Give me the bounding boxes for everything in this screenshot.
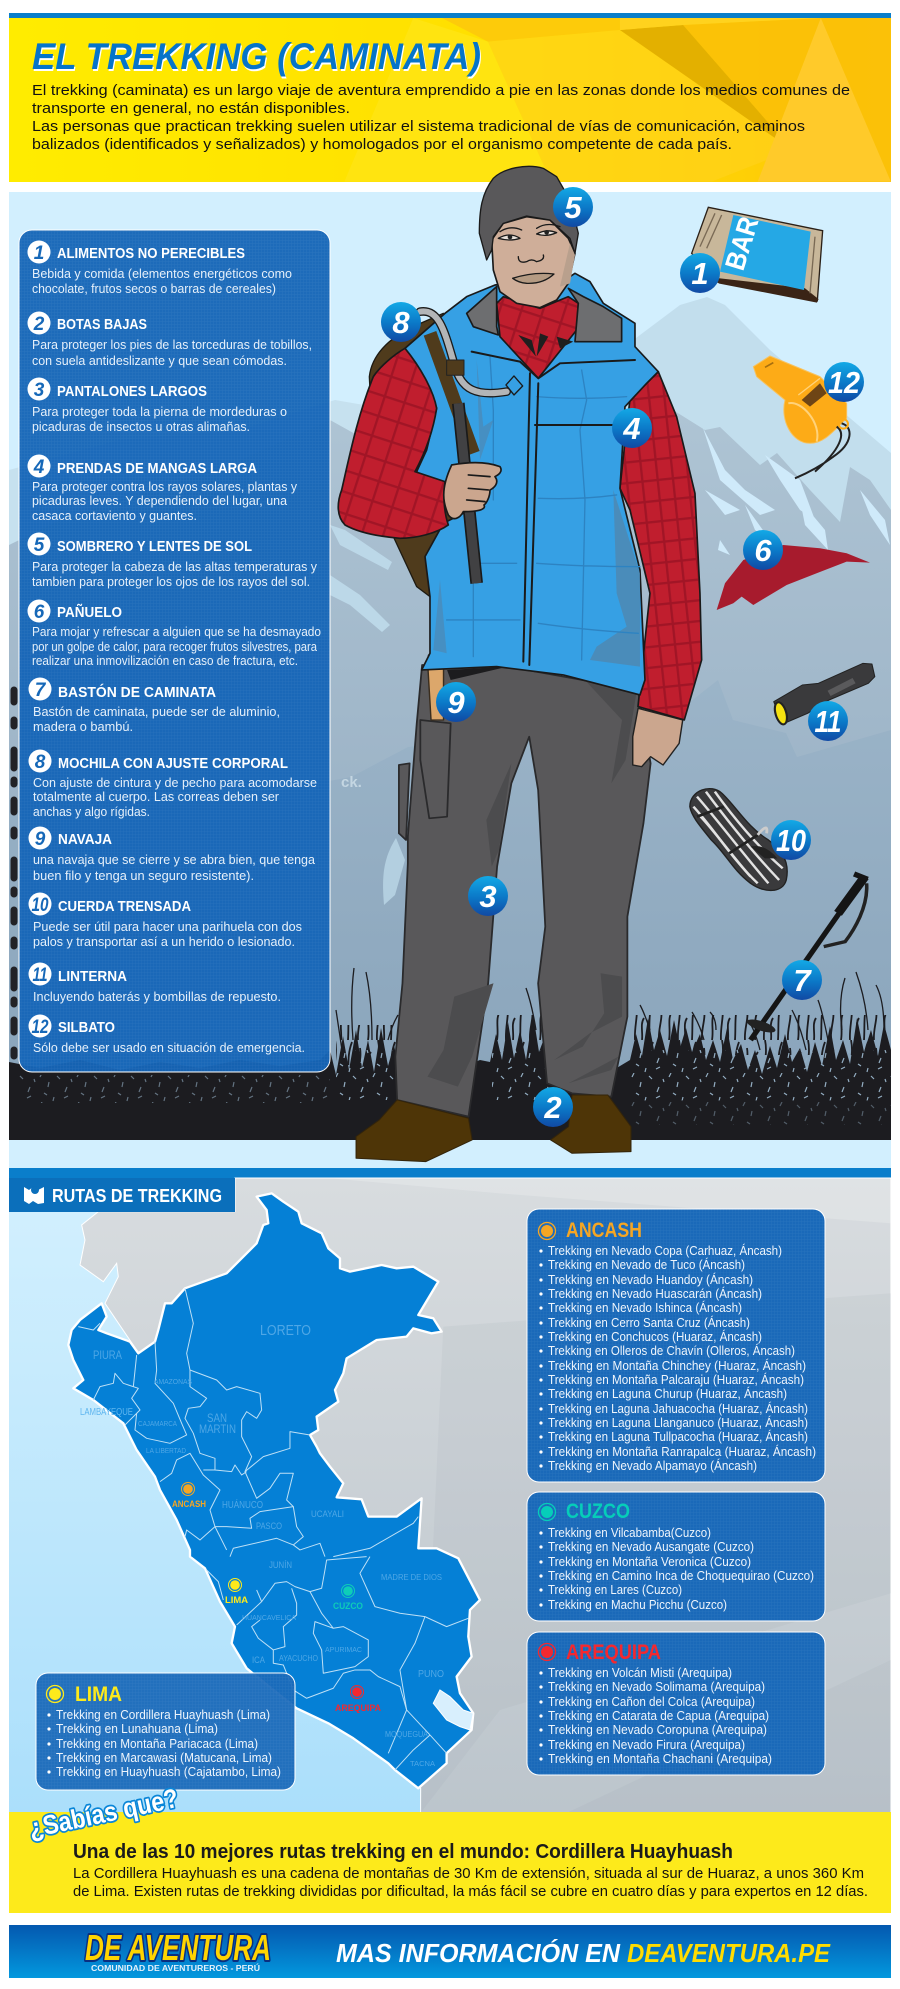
region labels: ICA <box>252 1655 265 1665</box>
icon: energy bar <box>692 207 823 301</box>
routes box: Ancash: Trekking en Nevado Huascarán (Áncash) <box>548 1286 762 1301</box>
list item 2: 2 <box>33 314 45 335</box>
list item 3: picaduras de insectos u otras alimañas. <box>32 419 250 434</box>
routes box: Cuzco: Trekking en Machu Picchu (Cuzco) <box>548 1598 727 1612</box>
routes box: Arequipa <box>527 1632 825 1775</box>
list item 10: CUERDA TRENSADA <box>58 899 191 915</box>
trekker upper body <box>338 166 702 720</box>
list item 7: 7 <box>35 680 47 701</box>
list item 2: Para proteger los pies de las torceduras de tobillos, <box>32 337 312 352</box>
panel: equipment scene background <box>9 192 891 1168</box>
list item 7 <box>28 678 280 734</box>
list item 6: PAÑUELO <box>57 603 122 621</box>
icon: rope coil <box>690 789 787 890</box>
list item 11: Incluyendo baterás y bombillas de repuesto. <box>33 989 281 1004</box>
list item 8 <box>28 750 317 819</box>
list item 6: Para mojar y refrescar a alguien que se ha desmayado <box>32 624 321 639</box>
list item 10: Puede ser útil para hacer una parihuela con dos <box>33 919 302 934</box>
routes box: Cuzco: Trekking en Camino Inca de Choquequirao (Cuzco) <box>548 1569 814 1583</box>
routes box: Arequipa: Trekking en Montaña Chachani (Arequipa) <box>548 1752 772 1766</box>
list item 12 <box>28 1014 305 1055</box>
routes box: Cuzco: CUZCO <box>566 1500 630 1523</box>
map marker: Lima <box>225 1578 248 1606</box>
routes box: Lima: LIMA <box>75 1683 122 1706</box>
list item 9: 9 <box>35 829 46 850</box>
routes box: Ancash: Trekking en Nevado de Tuco (Áncash) <box>548 1257 745 1272</box>
numbered badge 1 <box>680 253 720 293</box>
list item 12: Sólo debe ser usado en situación de emergencia. <box>33 1040 305 1055</box>
routes box: Ancash: Trekking en Laguna Llanganuco (Huaraz, Áncash) <box>548 1415 808 1430</box>
icon: red scarf <box>717 545 870 610</box>
routes box: Ancash: Trekking en Nevado Copa (Carhuaz, Áncash) <box>548 1243 782 1258</box>
list item 1: 1 <box>34 243 44 264</box>
list item 2: BOTAS BAJAS <box>57 317 147 333</box>
region labels: MADRE DE DIOS <box>381 1572 442 1582</box>
list item 4: 4 <box>33 457 45 478</box>
list item 7: Bastón de caminata, puede ser de aluminio, <box>33 704 280 719</box>
badge heading: sabias que: ¿Sabías que? <box>26 1783 181 1844</box>
logo: DE AVENTURA <box>85 1927 271 1968</box>
routes box: Lima: Trekking en Montaña Pariacaca (Lima) <box>56 1737 258 1751</box>
routes box: Ancash: Trekking en Nevado Alpamayo (Áncash) <box>548 1458 757 1473</box>
footer call to action <box>336 1938 831 1968</box>
list item 6 <box>28 600 321 668</box>
list item 9: NAVAJA <box>58 832 112 848</box>
list item 5: 5 <box>34 535 45 556</box>
region labels: PUNO <box>418 1669 444 1680</box>
region labels: JUNÍN <box>269 1560 292 1570</box>
routes box: Ancash: Trekking en Montaña Ranrapalca (Huaraz, Áncash) <box>548 1444 816 1459</box>
routes box: Lima: Trekking en Marcawasi (Matucana, Lima) <box>56 1751 272 1765</box>
region labels: AYACUCHO <box>279 1654 318 1663</box>
list item 3 <box>28 378 287 434</box>
routes box: Cuzco <box>527 1492 825 1621</box>
routes box: Arequipa: AREQUIPA <box>566 1641 661 1664</box>
region labels: LAMBAYEQUE <box>80 1407 133 1418</box>
watermark fragment: ck. <box>341 774 362 791</box>
region labels: APURIMAC <box>325 1645 363 1654</box>
region labels: TACNA <box>410 1759 435 1768</box>
routes box: Ancash: Trekking en Cerro Santa Cruz (Áncash) <box>548 1315 750 1330</box>
numbered badge 9: 9 <box>447 685 465 720</box>
numbered badge 6 <box>743 530 783 570</box>
region labels: MOQUEGUA <box>385 1730 429 1739</box>
grass silhouette <box>9 690 891 1140</box>
map marker: Lima: LIMA <box>225 1595 248 1606</box>
list item 5: SOMBRERO Y LENTES DE SOL <box>57 539 252 555</box>
routes box: Ancash: Trekking en Laguna Jahuacocha (Huaraz, Áncash) <box>548 1401 808 1416</box>
list item 12: 12 <box>32 1017 49 1038</box>
list item 9: una navaja que se cierre y se abra bien, que tenga <box>33 852 316 867</box>
numbered badge 10: 10 <box>776 823 806 858</box>
numbered badge 6: 6 <box>754 533 772 568</box>
list item 3: 3 <box>34 380 45 401</box>
numbered badge 7 <box>782 960 822 1000</box>
numbered badge 8 <box>381 302 421 342</box>
list item 8: Con ajuste de cintura y de pecho para acomodarse <box>33 775 317 790</box>
list item 9 <box>28 826 316 883</box>
list item 8: totalmente al cuerpo. Las correas deben ser <box>33 789 280 804</box>
map marker: Cuzco <box>333 1584 363 1612</box>
numbered badge 12: 12 <box>828 365 860 400</box>
list item 12: SILBATO <box>58 1020 115 1036</box>
logo <box>85 1927 271 1973</box>
numbered badge 3: 3 <box>479 879 497 914</box>
routes box: Cuzco: Trekking en Montaña Veronica (Cuzco) <box>548 1555 751 1569</box>
list item 4: PRENDAS DE MANGAS LARGA <box>57 461 257 477</box>
region labels: HUÁNUCO <box>222 1498 263 1511</box>
numbered badge 1: 1 <box>691 256 709 291</box>
region labels: CAJAMARCA <box>138 1419 177 1428</box>
list item 6: por un golpe de calor, para recoger frutos silvestres, para <box>32 639 318 654</box>
numbered badge 8: 8 <box>392 305 410 340</box>
region labels: LORETO <box>260 1322 311 1339</box>
intro text: El trekking (caminata) es un largo viaje de aventura emprendido a pie en las zonas donde los medios comunes de <box>32 82 850 99</box>
routes box: Arequipa: Trekking en Cañon del Colca (Arequipa) <box>548 1695 755 1709</box>
routes box: Ancash: Trekking en Laguna Tullpacocha (Huaraz, Áncash) <box>548 1429 808 1444</box>
numbered badge 11: 11 <box>814 704 842 739</box>
panel: did you know <box>9 1783 891 1913</box>
heading: rutas de trekking: RUTAS DE TREKKING <box>52 1186 222 1206</box>
routes box: Lima: Trekking en Huayhuash (Cajatambo, Lima) <box>56 1765 281 1779</box>
numbered badge 2: 2 <box>543 1090 562 1125</box>
list item 10 <box>28 892 302 949</box>
callout heading: Una de las 10 mejores rutas trekking en el mundo: Cordillera Huayhuash <box>73 1841 733 1863</box>
callout text: de Lima. Existen rutas de trekking divididas por dificultad, la más fácil se cubre en cuatro días y para expertos en 12 días. <box>73 1883 868 1900</box>
intro text <box>32 82 850 153</box>
region labels <box>80 1322 444 1768</box>
routes box: Lima: Trekking en Lunahuana (Lima) <box>56 1722 218 1736</box>
routes box: Cuzco: Trekking en Nevado Ausangate (Cuzco) <box>548 1540 754 1554</box>
list item 4: Para proteger contra los rayos solares, plantas y <box>32 479 297 494</box>
routes box: Cuzco: Trekking en Lares (Cuzco) <box>548 1583 682 1597</box>
routes box: Ancash <box>527 1209 825 1482</box>
icon: flashlight <box>773 663 875 726</box>
callout text: La Cordillera Huayhuash es una cadena de montañas de 30 Km de extensión, situada al sur de Huaraz, a unos 360 Km <box>73 1865 864 1882</box>
list item 1: chocolate, frutos secos o barras de cereales) <box>32 281 276 296</box>
list item 7: BASTÓN DE CAMINATA <box>58 683 217 701</box>
map marker: Ancash: ANCASH <box>172 1499 206 1510</box>
region labels: LA LIBERTAD <box>146 1446 186 1455</box>
routes box: Ancash: Trekking en Montaña Chinchey (Huaraz, Áncash) <box>548 1358 806 1373</box>
list item 6: realizar una inmovilización en caso de fractura, etc. <box>32 653 298 668</box>
numbered badge 4 <box>612 408 652 448</box>
list item 4: casaca cortaviento y guantes. <box>32 508 197 523</box>
illustration: trekker <box>338 166 702 1162</box>
routes box: Arequipa: Trekking en Volcán Misti (Arequipa) <box>548 1666 732 1680</box>
list item 8: anchas y algo rígidas. <box>33 804 150 819</box>
routes box: Ancash: Trekking en Montaña Palcaraju (Huaraz, Áncash) <box>548 1372 804 1387</box>
numbered badge 3 <box>468 876 508 916</box>
routes box: Lima: Trekking en Cordillera Huayhuash (Lima) <box>56 1708 270 1722</box>
list item 10: palos y transportar así a un herido o lesionado. <box>33 934 295 949</box>
numbered badge 7: 7 <box>793 963 812 998</box>
region labels: HUANCAVELICA <box>242 1613 296 1622</box>
list item 1: Bebida y comida (elementos energéticos como <box>32 266 292 281</box>
map marker: Cuzco: CUZCO <box>333 1601 363 1612</box>
title: EL TREKKING (CAMINATA) <box>32 36 481 77</box>
icon: whistle <box>753 356 850 478</box>
list item 5 <box>28 532 317 589</box>
panel: routes map section <box>9 1168 891 1813</box>
lake Titicaca <box>433 1690 473 1730</box>
list item 5: tambien para proteger los ojos de los rayos del sol. <box>32 574 310 589</box>
routes box: Ancash: Trekking en Olleros de Chavín (Olleros, Áncash) <box>548 1343 795 1358</box>
list item 4 <box>28 454 297 523</box>
heading: rutas de trekking <box>9 1178 235 1212</box>
intro text: Las personas que practican trekking suelen utilizar el sistema tradicional de vías de comunicación, caminos <box>32 118 805 135</box>
map marker: Arequipa <box>335 1686 381 1714</box>
region labels: PASCO <box>256 1521 282 1531</box>
footer banner <box>9 1925 891 1978</box>
numbered badge 4: 4 <box>622 411 641 446</box>
list item 3: PANTALONES LARGOS <box>57 384 207 400</box>
intro text: transporte en general, no están disponibles. <box>32 100 350 117</box>
logo: COMUNIDAD DE AVENTUREROS - PERÚ <box>91 1964 260 1973</box>
list item 8: MOCHILA CON AJUSTE CORPORAL <box>58 756 288 772</box>
region labels: SAN <box>207 1411 227 1425</box>
map marker: Arequipa: AREQUIPA <box>335 1703 381 1714</box>
routes box: Ancash: Trekking en Nevado Huandoy (Áncash) <box>548 1272 753 1287</box>
trekker legs and boots <box>356 654 683 1162</box>
list item 10: 10 <box>32 895 49 916</box>
list item 11: LINTERNA <box>58 969 127 985</box>
routes box: Arequipa: Trekking en Nevado Firura (Arequipa) <box>548 1738 745 1752</box>
list item 9: buen filo y tenga un seguro resistente). <box>33 868 254 883</box>
footer call to action: MAS INFORMACIÓN EN <box>336 1938 621 1968</box>
region labels: MARTIN <box>199 1422 236 1436</box>
routes box: Cuzco: Trekking en Vilcabamba(Cuzco) <box>548 1526 711 1540</box>
routes box: Ancash: Trekking en Nevado Ishinca (Áncash) <box>548 1300 742 1315</box>
panel: equipment list <box>19 230 330 1072</box>
list item 4: picaduras leves. Y dependiendo del lugar, una <box>32 493 288 508</box>
icon: trekking pole <box>745 874 868 1040</box>
list item 11 <box>28 962 281 1004</box>
region labels: UCAYALI <box>311 1509 344 1519</box>
list item 1 <box>28 240 292 296</box>
footer call to action: DEAVENTURA.PE <box>627 1938 831 1968</box>
list item 2: con suela antideslizante y que sean cómodas. <box>32 353 287 368</box>
map marker: Ancash <box>172 1482 206 1510</box>
map of Peru <box>68 1193 480 1788</box>
numbered badge 5 <box>553 187 593 227</box>
routes box: Ancash: Trekking en Laguna Churup (Huaraz, Áncash) <box>548 1386 787 1401</box>
list item 11: 11 <box>32 965 48 986</box>
list item 7: madera o bambú. <box>33 719 133 734</box>
routes box: Arequipa: Trekking en Nevado Solimama (Arequipa) <box>548 1680 765 1694</box>
intro text: balizados (identificados y señalizados) y homologados por el organismo competente de cada país. <box>32 136 732 153</box>
numbered badge 9 <box>436 682 476 722</box>
region labels: AMAZONAS <box>154 1377 192 1386</box>
numbered badge 5: 5 <box>564 190 582 225</box>
numbered badge 2 <box>533 1087 573 1127</box>
list item 2 <box>28 312 312 368</box>
callout text <box>73 1865 868 1900</box>
routes box: Ancash: ANCASH <box>566 1219 642 1242</box>
routes box: Lima <box>36 1673 295 1790</box>
list item 8: 8 <box>35 752 46 773</box>
region labels: PIURA <box>93 1348 122 1362</box>
list item 1: ALIMENTOS NO PERECIBLES <box>57 246 245 262</box>
list item 6: 6 <box>34 602 45 623</box>
list item 5: Para proteger la cabeza de las altas temperaturas y <box>32 559 317 574</box>
routes box: Arequipa: Trekking en Catarata de Capua (Arequipa) <box>548 1709 769 1723</box>
icon label: BAR: BAR <box>719 213 765 274</box>
list item 3: Para proteger toda la pierna de mordeduras o <box>32 404 287 419</box>
routes box: Ancash: Trekking en Conchucos (Huaraz, Áncash) <box>548 1329 762 1344</box>
header: top banner <box>9 13 891 182</box>
routes box: Arequipa: Trekking en Nevado Coropuna (Arequipa) <box>548 1723 767 1737</box>
